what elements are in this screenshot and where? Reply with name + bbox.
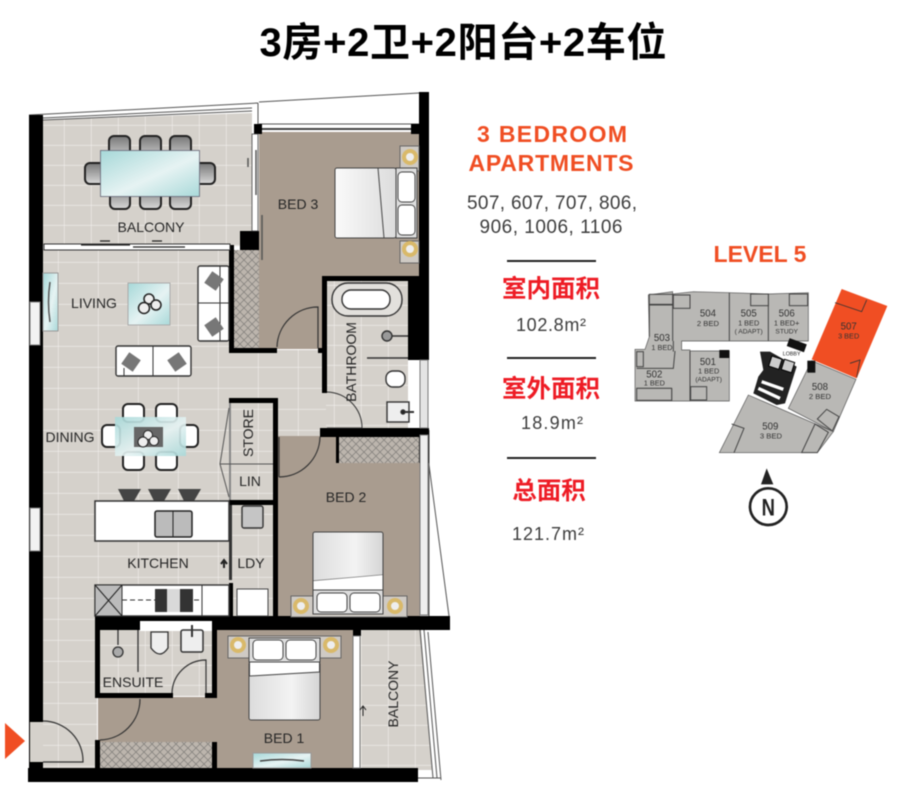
door of bed 3	[277, 307, 318, 348]
west wing balconies	[637, 294, 808, 400]
laundry sink	[242, 506, 263, 528]
north arrow: N	[762, 494, 775, 521]
divider	[507, 357, 596, 359]
key plan labels: 2 BED	[809, 392, 832, 401]
unit 507	[812, 289, 887, 378]
key plan labels: 501	[700, 357, 716, 368]
total area: 总面积	[512, 477, 586, 505]
indoor area: 室内面积	[502, 274, 600, 303]
black core markers	[719, 338, 815, 373]
key plan labels: 1 BED+	[774, 318, 799, 327]
key plan labels: 2 BED	[697, 319, 720, 328]
ensuite fixtures	[113, 621, 212, 672]
room labels: ENSUITE	[103, 674, 163, 690]
floor: living, dining and kitchen tiles	[43, 249, 326, 770]
room labels: BED 2	[326, 489, 366, 505]
key plan labels	[644, 309, 859, 440]
lift core	[753, 352, 797, 405]
key plan labels: 506	[779, 309, 795, 320]
key plan labels: 505	[741, 309, 757, 320]
kitchen island	[95, 501, 229, 541]
heading: 3 bedroom apartments	[468, 121, 634, 176]
floor: balcony tiles	[43, 113, 252, 246]
balcony railings	[29, 93, 449, 780]
total area: 121.7m²	[512, 524, 584, 544]
door of ensuite	[172, 660, 206, 693]
indoor area	[502, 274, 600, 335]
walls	[28, 92, 450, 782]
floor: bedroom 3 carpet	[259, 132, 419, 349]
bed 1 furniture	[228, 636, 341, 720]
key plan labels: 509	[762, 421, 778, 432]
bed 1 console	[253, 753, 311, 768]
apartment numbers: 507, 607, 707, 806,	[467, 193, 637, 214]
windows	[30, 302, 428, 768]
key plan labels: (ADAPT)	[695, 377, 722, 384]
bed 2 furniture	[291, 532, 407, 617]
living room rug and table	[128, 283, 170, 325]
unit dividers	[637, 293, 768, 401]
entry door	[43, 721, 83, 762]
divider	[507, 457, 596, 459]
west wing units	[635, 292, 808, 401]
room labels	[46, 196, 401, 746]
room labels: BED 1	[264, 730, 304, 746]
indoor area: 102.8m²	[516, 315, 586, 335]
key plan labels: 1 BED	[738, 318, 759, 327]
key plan labels: 503	[654, 333, 670, 344]
room labels: BALCONY	[118, 219, 185, 235]
entry arrow	[5, 723, 25, 759]
room labels: LIVING	[71, 295, 117, 311]
dining table on balcony	[85, 136, 215, 209]
door of bed 2	[279, 437, 320, 477]
heading: 3 bedroom apartments: APARTMENTS	[468, 150, 634, 176]
bed 3 furniture	[335, 146, 419, 263]
unit 508	[788, 361, 856, 432]
floor: bedroom 1 carpet	[98, 630, 354, 770]
washer	[237, 589, 268, 616]
unit 509	[719, 395, 833, 453]
apartment numbers: 906, 1006, 1106	[480, 217, 622, 238]
store shelf outline	[220, 408, 273, 497]
room labels: DINING	[46, 429, 94, 445]
room labels: LIN	[239, 473, 261, 489]
total area	[512, 477, 586, 544]
level heading: LEVEL 5	[714, 241, 807, 267]
bathroom fixtures	[327, 283, 414, 428]
kitchen counter	[95, 585, 229, 616]
armchair sofa	[198, 266, 229, 341]
room labels: STORE	[240, 409, 256, 457]
side balcony arrow	[360, 706, 366, 716]
living room console	[43, 273, 58, 331]
floor: ensuite tiles	[98, 630, 214, 696]
side door of balcony	[248, 134, 262, 260]
room labels: BALCONY	[385, 660, 401, 727]
key plan labels: 1 BED	[651, 343, 673, 352]
floor: side balcony tiles	[360, 630, 432, 770]
key plan labels: 508	[812, 382, 828, 393]
key plan labels: ( ADAPT)	[735, 329, 763, 336]
sofa	[116, 346, 191, 376]
bar stools	[118, 489, 201, 501]
kitchen arrow	[221, 560, 227, 568]
floor: bedroom 2 carpet	[277, 436, 420, 618]
key plan labels: 3 BED	[838, 331, 859, 340]
north arrow	[750, 468, 787, 525]
key plan labels: 507	[841, 321, 857, 332]
outdoor area	[502, 374, 600, 433]
level key plan	[635, 289, 887, 525]
floor: bathroom tiles	[326, 279, 410, 431]
floor: store and laundry	[229, 402, 275, 617]
key plan labels: LOBBY	[783, 352, 801, 358]
outdoor area: 室外面积	[502, 374, 600, 403]
divider	[507, 260, 596, 262]
wardrobes	[100, 250, 419, 768]
key plan labels: 1 BED	[698, 366, 719, 375]
key plan labels: 1 BED	[644, 378, 665, 387]
balcony sliding door	[44, 241, 230, 250]
key plan labels: STUDY	[775, 329, 799, 336]
key plan labels: 3 BED	[760, 431, 783, 440]
door of bed 1	[100, 699, 140, 740]
dining table	[102, 404, 198, 470]
key plan labels: 502	[646, 369, 662, 380]
outdoor area: 18.9m²	[521, 413, 583, 433]
room labels: BED 3	[278, 196, 318, 212]
room labels: BATHROOM	[343, 322, 359, 402]
room labels: KITCHEN	[127, 555, 189, 571]
heading: 3 bedroom apartments: 3 BEDROOM	[477, 121, 627, 147]
key plan labels: 504	[700, 309, 717, 320]
room labels: LDY	[237, 555, 265, 571]
title: 3房+2卫+2阳台+2车位	[260, 21, 666, 65]
floor plan	[28, 92, 450, 782]
apartment numbers	[467, 193, 637, 238]
